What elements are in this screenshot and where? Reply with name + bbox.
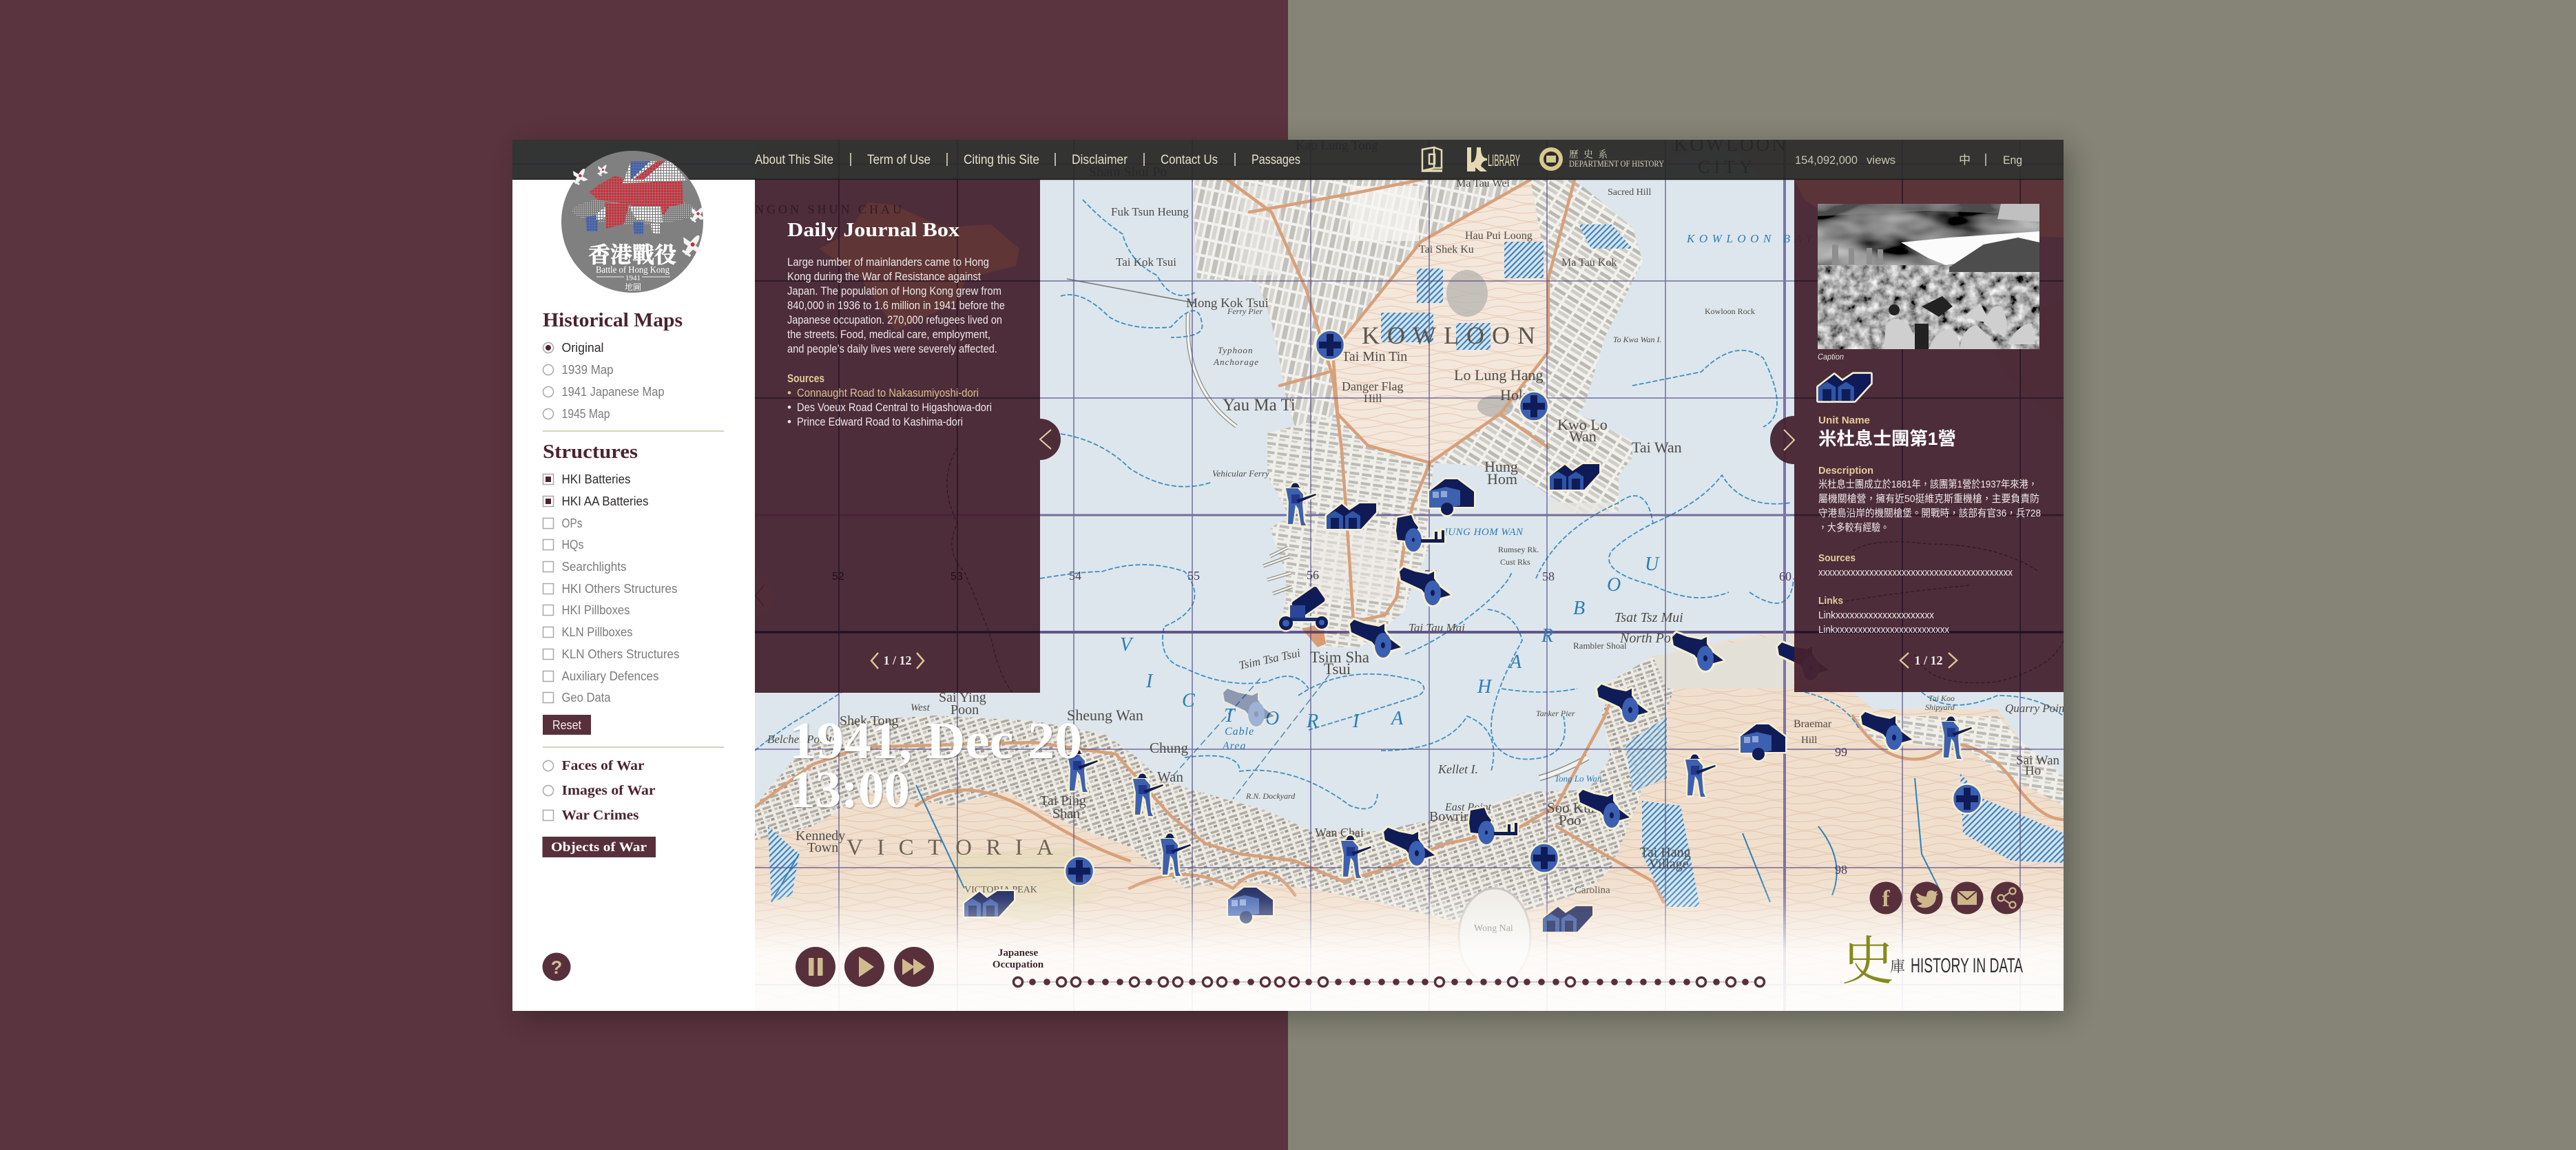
unit name bbox=[1818, 415, 1956, 449]
map: place name labels: Rumsey Rk. bbox=[1498, 545, 1539, 554]
nav links: Passages bbox=[1251, 153, 1300, 167]
photo: gun crew in rubble bbox=[1818, 204, 2039, 349]
map: Hong Kong Island land bbox=[755, 632, 2064, 1011]
icon: cannon bbox=[1597, 684, 1648, 722]
journal sources: Des Voeux Road Central to Higashowa-dori bbox=[797, 401, 992, 414]
description: Description bbox=[1818, 465, 1873, 477]
icon: battle of Hong Kong round logo: 地圖 bbox=[625, 281, 641, 293]
bottom white fade bbox=[755, 873, 2064, 1011]
timeline label: Japanese Occupation bbox=[993, 948, 1044, 970]
map: place name labels: Wan bbox=[1157, 769, 1183, 785]
map: place name labels: East Point bbox=[1444, 802, 1492, 813]
icon: barracks bbox=[1327, 503, 1376, 529]
checkbox list: structures: Searchlights bbox=[562, 560, 627, 574]
icon: facebook bbox=[1869, 881, 1902, 914]
map: place name labels: Kowloon Rock bbox=[1705, 306, 1755, 316]
background: olive grey right half bbox=[1288, 0, 2576, 1150]
view counter bbox=[1795, 154, 1895, 167]
nav links: Disclaimer bbox=[1072, 153, 1128, 167]
map: place name labels: Bowring bbox=[1429, 809, 1477, 824]
map: place name labels: Sheung Wan bbox=[1067, 707, 1143, 724]
map: place name labels: Chung bbox=[1150, 740, 1189, 756]
unit links bbox=[1818, 595, 1949, 636]
icon: soldier bbox=[1068, 749, 1098, 792]
button: play bbox=[844, 947, 884, 987]
unit name: 米杜息士團第1營 bbox=[1818, 428, 1956, 449]
journal sources: Prince Edward Road to Kashima-dori bbox=[797, 415, 963, 428]
button: fast forward bbox=[894, 947, 934, 987]
map: place name labels: Yau Ma Ti bbox=[1223, 396, 1296, 415]
map: place name labels: Town bbox=[807, 840, 838, 855]
options: war layers: Faces of War bbox=[562, 758, 645, 773]
heading: Historical Maps: Historical Maps bbox=[543, 310, 683, 331]
checkbox list: structures: Auxiliary Defences bbox=[562, 669, 658, 683]
panel: daily journal box: NGON SHUN CHAU bbox=[755, 202, 904, 216]
options: war layers: War Crimes bbox=[562, 808, 639, 823]
map: Stonecutters and New Territories land bbox=[755, 140, 2064, 427]
map: place name labels: VICTORIA bbox=[846, 835, 1053, 860]
icon: faded cannon bbox=[1223, 689, 1274, 726]
journal body text: Kong during the War of Resistance against bbox=[787, 270, 981, 283]
icon: cannon bbox=[1350, 620, 1401, 658]
journal body text: 840,000 in 1936 to 1.6 million in 1941 before the bbox=[787, 299, 1005, 312]
map: harbour lettering in blue: A bbox=[1390, 708, 1404, 729]
map: place name labels: Sham Shui Po bbox=[1089, 165, 1167, 180]
current date and time: 1941, Dec 20 bbox=[789, 712, 1082, 770]
unit sources: xxxxxxxxxxxxxxxxxxxxxxxxxxxxxxxxxxxxxxxxxx bbox=[1818, 567, 2013, 578]
icon: truck bbox=[1429, 479, 1474, 515]
map: place name labels: Danger Flag bbox=[1342, 379, 1403, 393]
icon: cannon bbox=[1672, 633, 1723, 671]
map: place name labels: 98 bbox=[1835, 863, 1847, 877]
unit links: Linkxxxxxxxxxxxxxxxxxxxxx bbox=[1818, 609, 1934, 621]
icon: soldier bbox=[1161, 833, 1191, 876]
map: harbour lettering in blue: R bbox=[1541, 625, 1553, 647]
unit sources: Sources bbox=[1818, 552, 1856, 564]
map: historical map of Victoria Harbour bbox=[512, 134, 2068, 1011]
journal sources: • bbox=[787, 401, 791, 414]
journal body text: Japan. The population of Hong Kong grew from bbox=[787, 284, 1001, 297]
map: place name labels: Mong Kok Tsui bbox=[1186, 296, 1269, 311]
icon: truck bbox=[1741, 724, 1785, 760]
map: place name labels: Hill bbox=[1364, 392, 1382, 405]
icon: soldier bbox=[1341, 836, 1371, 878]
map: place name labels: Poo bbox=[1559, 812, 1581, 828]
icon: twitter bbox=[1911, 881, 1942, 914]
playback controls bbox=[796, 947, 934, 987]
nav links: About This Site bbox=[755, 153, 833, 167]
icon: medical cross bbox=[1519, 391, 1548, 421]
journal body text: Large number of mainlanders came to Hong bbox=[787, 255, 989, 269]
journal sources: • bbox=[787, 386, 791, 399]
map: place name labels: 56 bbox=[1307, 568, 1319, 582]
nav links: Term of Use bbox=[867, 153, 931, 167]
radio list: map choice: 1939 Map bbox=[562, 363, 613, 377]
journal sources: Sources bbox=[787, 372, 824, 385]
map: place name labels: North Point bbox=[1619, 631, 1685, 646]
options: war layers bbox=[543, 758, 656, 823]
map: place name labels: VICTORIA PEAK bbox=[964, 885, 1037, 895]
map: place name labels: 99 bbox=[1835, 745, 1847, 759]
map: place name labels: Tai Wan bbox=[1632, 439, 1682, 456]
social share buttons bbox=[1869, 881, 2024, 914]
arrow: previous journal panel bbox=[1040, 430, 1051, 449]
map: place name labels bbox=[767, 134, 2068, 934]
map: place name labels: West bbox=[911, 702, 931, 713]
logo: History in Data: 庫 bbox=[1890, 955, 1905, 976]
checkbox list: structures: Geo Data bbox=[562, 691, 611, 704]
nav links bbox=[755, 153, 1300, 167]
radio list: map choice: Original bbox=[562, 341, 603, 355]
map: place name labels: 54 bbox=[1069, 569, 1081, 583]
pagination: journal: 1 / 12 bbox=[883, 654, 912, 667]
map: place name labels: Tai Ping bbox=[1040, 793, 1086, 808]
map: place name labels: Tai Hang bbox=[1640, 845, 1691, 860]
top navigation bar: LIBRARY bbox=[1488, 151, 1520, 170]
map: harbour lettering in blue: I bbox=[1145, 671, 1154, 692]
icon: battle of Hong Kong round logo: 1941 bbox=[625, 274, 641, 282]
arrow: next unit panel bbox=[1784, 430, 1794, 450]
description: 屬機關槍營，擁有近50挺維克斯重機槍，主要負責防 bbox=[1818, 493, 2039, 505]
map: place name labels: R.N. Dockyard bbox=[1245, 791, 1296, 801]
pagination: journal bbox=[871, 653, 924, 669]
map: place name labels: Wong Nai bbox=[1474, 923, 1513, 934]
map: roads bbox=[755, 180, 2064, 902]
icon: towed gun bbox=[1396, 515, 1444, 552]
map: place name labels: To Kwa Wan I. bbox=[1613, 335, 1661, 344]
map: place name labels: Cust Rks bbox=[1500, 557, 1530, 567]
map: place name labels: Ma Tau Kok bbox=[1561, 257, 1617, 269]
map: place name labels: Typhoon bbox=[1218, 345, 1254, 355]
nav links: Contact Us bbox=[1161, 153, 1218, 167]
icon: medical cross bbox=[1316, 331, 1344, 359]
language switcher: 中 bbox=[1959, 154, 1971, 167]
checkbox list: structures: OPs bbox=[562, 516, 583, 530]
toggle: collapse sidebar bbox=[755, 575, 776, 616]
icon: medical cross bbox=[1953, 784, 1982, 814]
map: place name labels: Sai Ying bbox=[939, 690, 986, 705]
map: place name labels: Tsim Tsa Tsui bbox=[1238, 646, 1302, 672]
map: place name labels: Hau Pui Loong bbox=[1465, 230, 1533, 242]
button: help bbox=[543, 953, 570, 981]
icon: battle of Hong Kong round logo bbox=[561, 151, 710, 293]
map: place name labels: Ferry Pier bbox=[1227, 306, 1263, 316]
pagination: unit: 1 / 12 bbox=[1914, 654, 1943, 667]
icon: battle of Hong Kong round logo: 香港戰役 bbox=[588, 238, 676, 269]
map: place name labels: Wan bbox=[1569, 428, 1597, 445]
map: place name labels: Tai Koo bbox=[1929, 693, 1955, 703]
icon: cannon bbox=[1400, 567, 1451, 605]
map: place name labels: Tai Kok Tsui bbox=[1116, 255, 1176, 269]
button: pause bbox=[796, 947, 835, 987]
timeline dots bbox=[1014, 978, 1765, 986]
caption: Caption bbox=[1818, 352, 1844, 362]
icon: soldier bbox=[1942, 716, 1972, 759]
panel: daily journal box: 53 bbox=[951, 571, 963, 583]
map: place name labels: Poon bbox=[951, 702, 979, 718]
map: place name labels: KOWLOON bbox=[1362, 322, 1535, 349]
icon: cannon bbox=[1579, 790, 1630, 828]
button: Objects of War bbox=[543, 837, 656, 857]
radio list: map choice bbox=[543, 341, 664, 421]
map: Kowloon peninsula bbox=[1192, 180, 1643, 647]
map: place name labels: Ma Tau Wei bbox=[1456, 178, 1510, 189]
icon: faded barracks bbox=[1543, 906, 1592, 932]
button: Reset bbox=[543, 715, 591, 735]
description: ，大多較有經驗。 bbox=[1818, 521, 1889, 534]
map: harbour lettering in blue: Area bbox=[1222, 740, 1247, 752]
map: place name labels: Village bbox=[1649, 857, 1689, 872]
map: harbour lettering in blue: KOWLOON BAY bbox=[1686, 232, 1814, 245]
map: place name labels: KOWLOON bbox=[1674, 134, 1788, 156]
button: Reset: Reset bbox=[552, 718, 581, 732]
background: maroon left half bbox=[0, 0, 1288, 1150]
icon: barracks bbox=[1550, 464, 1599, 490]
logo: History in Data: HISTORY IN DATA bbox=[1911, 954, 2023, 977]
pagination: unit bbox=[1900, 653, 1957, 668]
timeline label: Japanese Occupation: Occupation bbox=[993, 959, 1044, 970]
map: harbour lettering in blue bbox=[1120, 232, 1814, 784]
timeline label: Japanese Occupation: Japanese bbox=[998, 948, 1039, 959]
view counter: views bbox=[1867, 154, 1895, 167]
unit name: Unit Name bbox=[1818, 415, 1870, 426]
map: place name labels: Hill bbox=[1801, 735, 1817, 746]
map: place name labels: Vehicular Ferry bbox=[1212, 468, 1269, 479]
checkbox list: structures: HKI Batteries bbox=[562, 472, 631, 486]
icon: soldier bbox=[1286, 483, 1316, 525]
map: place name labels: Shek Tong bbox=[840, 713, 898, 729]
map: place name labels: 57 bbox=[1424, 567, 1437, 581]
map: place name labels: Shipyard bbox=[1925, 702, 1955, 712]
map: place name labels: Quarry Point bbox=[2005, 702, 2068, 715]
language switcher bbox=[1959, 154, 2022, 167]
journal body text: Japanese occupation. 270,000 refugees lived on bbox=[787, 313, 1002, 326]
map: place name labels: Sacred Hill bbox=[1608, 187, 1651, 198]
top navigation bar bbox=[512, 140, 2064, 180]
map: place name labels: Fuk Tsun Heung bbox=[1111, 205, 1189, 218]
journal sources: Connaught Road to Nakasumiyoshi-dori bbox=[797, 386, 979, 399]
logo: History in Data bbox=[1842, 919, 2023, 994]
map: place name labels: Rambler Shoal bbox=[1573, 640, 1627, 651]
panel: daily journal box bbox=[755, 180, 1061, 693]
map: place name labels: Tsat Tsz Mui bbox=[1614, 610, 1683, 625]
icon: towed gun bbox=[1469, 808, 1517, 844]
checkbox list: structures: KLN Others Structures bbox=[562, 647, 679, 661]
icon: truck bbox=[1228, 888, 1273, 923]
map: harbour lettering in blue: Cable bbox=[1225, 726, 1254, 738]
icon: mail bbox=[1951, 881, 1984, 914]
language switcher: Eng bbox=[2003, 154, 2022, 167]
map: place name labels: Wan Chai bbox=[1315, 826, 1364, 839]
button: Objects of War: Objects of War bbox=[551, 840, 647, 855]
map: place name labels: Hung bbox=[1484, 458, 1518, 475]
logo: History in Data: 史 bbox=[1842, 919, 1894, 994]
icon: soldier bbox=[1133, 774, 1163, 816]
icon: medical cross bbox=[1530, 843, 1559, 873]
journal sources bbox=[787, 372, 992, 428]
map: place name labels: Tai Shek Ku bbox=[1419, 244, 1474, 255]
checkbox list: structures: HKI AA Batteries bbox=[562, 494, 649, 508]
checkbox list: structures: HKI Others Structures bbox=[562, 582, 678, 596]
map: place name labels: Lo Lung Hang bbox=[1454, 366, 1544, 384]
map: place name labels: Carolina bbox=[1575, 885, 1610, 896]
map: place name labels: 58 bbox=[1542, 569, 1555, 583]
map: place name labels: Hok bbox=[1500, 386, 1526, 404]
map: harbour lettering in blue: I bbox=[1352, 711, 1360, 732]
map: harbour lettering in blue: HUNG HOM WAN bbox=[1440, 527, 1524, 538]
map: place name labels: Shan bbox=[1052, 806, 1080, 822]
icon: facebook: f bbox=[1882, 886, 1890, 912]
map: harbour lettering in blue: B bbox=[1573, 598, 1585, 619]
unit links: Linkxxxxxxxxxxxxxxxxxxxxxxxxx bbox=[1818, 624, 1949, 636]
map: place name labels: Sai Wan bbox=[2016, 753, 2060, 768]
map: coast river lines bbox=[771, 778, 1942, 902]
map: place name labels: Tsim Sha bbox=[1310, 649, 1369, 666]
icon: searchlight bbox=[1279, 586, 1328, 630]
map: harbour lettering in blue: C bbox=[1182, 690, 1195, 711]
map: harbour lettering in blue: Tong Lo Wan bbox=[1555, 773, 1601, 784]
map: depth contours bbox=[755, 200, 2064, 808]
journal body text: the streets. Food, medical care, employment, bbox=[787, 328, 990, 341]
icon: medical cross bbox=[1065, 857, 1094, 886]
checkbox list: structures bbox=[543, 472, 679, 704]
unit sources bbox=[1818, 552, 2013, 578]
map: place name labels: Ho bbox=[2025, 764, 2041, 778]
nav links: Citing this Site bbox=[964, 153, 1039, 167]
map: harbour lettering in blue: U bbox=[1645, 554, 1660, 575]
heading: Structures: Structures bbox=[543, 441, 638, 463]
icon: department of history logo bbox=[1539, 147, 1665, 171]
map: harbour lettering in blue: A bbox=[1508, 651, 1522, 673]
icon: cannon bbox=[1861, 712, 1912, 750]
map: place name labels: Soo Kun bbox=[1547, 799, 1599, 816]
icon: book logo bbox=[1422, 147, 1442, 171]
map: place name labels: Kau Lung Tong bbox=[1296, 138, 1378, 153]
icon: cannon bbox=[1384, 828, 1435, 866]
radio list: map choice: 1945 Map bbox=[562, 407, 610, 421]
map: place name labels: Kennedy bbox=[796, 828, 845, 844]
panel: daily journal box: 52 bbox=[832, 571, 844, 583]
checkbox list: structures: KLN Pillboxes bbox=[562, 625, 632, 639]
unit links: Links bbox=[1818, 595, 1843, 607]
icon: cannon clipped by panel bbox=[1778, 642, 1829, 680]
map: harbour lettering in blue: O bbox=[1607, 574, 1621, 596]
map: place name labels: Tai Min Tin bbox=[1342, 349, 1407, 364]
map: place name labels: Anchorage bbox=[1213, 357, 1259, 367]
map: harbour lettering in blue: T bbox=[1224, 705, 1236, 726]
map: place name labels: Belcher Point bbox=[767, 733, 833, 746]
icon: barracks bbox=[964, 891, 1014, 917]
map: harbour lettering in blue: H bbox=[1477, 676, 1493, 698]
panel: sidebar bbox=[512, 151, 755, 1011]
map: place name labels: Kwo Lo bbox=[1557, 416, 1608, 433]
map: typhoon breakwater and piers bbox=[1067, 279, 1588, 778]
options: war layers: Images of War bbox=[562, 783, 656, 798]
icon: share bbox=[1991, 881, 2024, 914]
icon: department of history logo: 歷史系 bbox=[1569, 149, 1612, 160]
icon: soldier bbox=[1685, 755, 1716, 797]
current date and time bbox=[789, 712, 1082, 819]
map: place name labels: Hom bbox=[1487, 470, 1517, 488]
heading: Daily Journal Box: Daily Journal Box bbox=[787, 219, 960, 241]
map: place name labels: CITY bbox=[1698, 157, 1756, 177]
map: place name labels: Kellet I. bbox=[1437, 762, 1478, 776]
icon: barracks badge bbox=[1818, 374, 1871, 401]
journal body text bbox=[787, 255, 1005, 355]
checkbox list: structures: HQs bbox=[562, 538, 584, 552]
map: place name labels: Tsui bbox=[1324, 660, 1351, 678]
radio list: map choice: 1941 Japanese Map bbox=[562, 385, 664, 399]
map: place name labels: Tai Tau Mai bbox=[1409, 621, 1465, 634]
map: place name labels: Tanker Pier bbox=[1536, 709, 1575, 718]
button: help: ? bbox=[551, 957, 562, 978]
journal sources: • bbox=[787, 415, 791, 428]
current date and time: 13:00 bbox=[789, 761, 910, 819]
map: harbour lettering in blue: R bbox=[1306, 711, 1318, 732]
map: harbour lettering in blue: O bbox=[1265, 708, 1279, 729]
map: grid lines bbox=[512, 140, 2064, 1011]
map: harbour lettering in blue: V bbox=[1120, 634, 1134, 656]
map: place name labels: 55 bbox=[1187, 569, 1200, 583]
map: place name labels: Braemar bbox=[1794, 718, 1832, 730]
panel: unit detail bbox=[1770, 180, 2064, 692]
checkbox list: structures: HKI Pillboxes bbox=[562, 603, 630, 617]
description bbox=[1818, 465, 2041, 534]
icon: department of history logo: DEPARTMENT OF HISTORY bbox=[1569, 158, 1665, 169]
card shadow bbox=[521, 146, 2070, 1017]
description: 米杜息士團成立於1881年，該團第1營於1937年來港， bbox=[1818, 478, 2037, 490]
map: cable lines bbox=[1171, 675, 1329, 799]
journal body text: and people’s daily lives were severely affected. bbox=[787, 342, 997, 355]
view counter: 154,092,000 bbox=[1795, 154, 1858, 167]
icon: battle of Hong Kong round logo: Battle of Hong Kong bbox=[596, 265, 669, 275]
map: place name labels: 60 bbox=[1779, 569, 1791, 583]
description: 守港島沿岸的機關槍堡。開戰時，該部有官36，兵728 bbox=[1818, 508, 2041, 519]
icon: university library logo bbox=[1467, 147, 1520, 171]
